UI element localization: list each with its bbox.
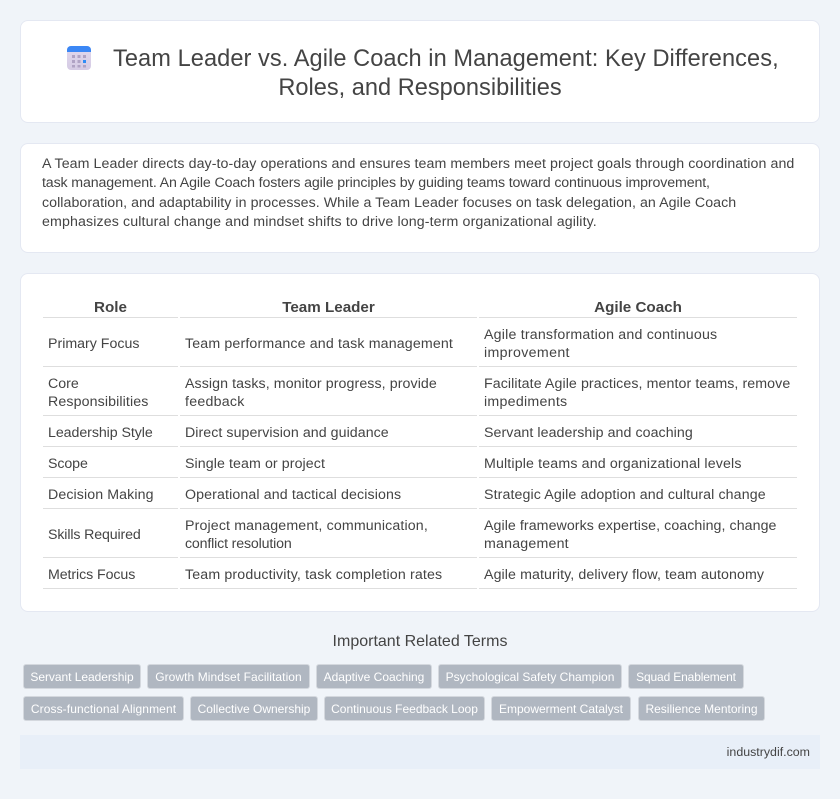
table header: Team Leader: Team Leader (282, 299, 375, 316)
row: Scope: Scope (48, 456, 88, 472)
related term tags: Continuous Feedback Loop (331, 702, 478, 716)
row: Skills Required: management (484, 536, 569, 552)
row: Decision Making (48, 487, 766, 503)
related term tags: Collective Ownership (198, 702, 310, 716)
intro text: collaboration, and adaptability in processes. While a Team Leader focuses on task delegation, an Agile Coach (42, 195, 736, 211)
footer bar (20, 735, 820, 769)
intro text (42, 156, 794, 230)
row: Metrics Focus (48, 567, 764, 583)
row: Skills Required: conflict resolution (185, 536, 292, 552)
row: Skills Required: Agile frameworks expertise, coaching, change (484, 518, 776, 534)
icon: calendar (67, 46, 91, 70)
intro text: emphasizes cultural change and mindset shifts to drive long-term organizational agility. (42, 214, 597, 230)
table header: Role: Role (94, 299, 127, 316)
row: Decision Making: Operational and tactical decisions (185, 487, 401, 503)
row: Metrics Focus: Team productivity, task completion rates (185, 567, 442, 583)
row: Core Responsibilities: feedback (185, 394, 245, 410)
intro card (20, 143, 820, 253)
related term tags: Empowerment Catalyst (499, 702, 623, 716)
related term tags: Servant Leadership (30, 670, 134, 684)
row: Skills Required: Project management, communication, (185, 518, 428, 534)
row: Metrics Focus: Agile maturity, delivery flow, team autonomy (484, 567, 764, 583)
footer source text: industrydif.com (727, 745, 810, 759)
comparison table (43, 317, 797, 589)
row: Core Responsibilities: Responsibilities (48, 394, 148, 410)
title: Roles, and Responsibilities (278, 75, 562, 101)
row: Primary Focus: Primary Focus (48, 336, 139, 352)
row: Skills Required: Skills Required (48, 527, 141, 543)
row: Leadership Style: Direct supervision and guidance (185, 425, 389, 441)
related term tags: Growth Mindset Facilitation (155, 670, 302, 684)
related term tags: Cross-functional Alignment (31, 702, 176, 716)
row: Leadership Style: Leadership Style (48, 425, 153, 441)
row: Scope: Single team or project (185, 456, 325, 472)
row: Scope (48, 456, 742, 472)
row: Core Responsibilities: impediments (484, 394, 567, 410)
row: Metrics Focus: Metrics Focus (48, 567, 135, 583)
row: Core Responsibilities: Facilitate Agile practices, mentor teams, remove (484, 376, 790, 392)
row: Scope: Multiple teams and organizational levels (484, 456, 742, 472)
related term tags: Psychological Safety Champion (446, 670, 614, 684)
row: Primary Focus: Team performance and task management (185, 336, 453, 352)
title: Team Leader vs. Agile Coach in Management: Key Differences, (113, 46, 779, 72)
comparison table panel (20, 273, 820, 612)
row: Primary Focus: improvement (484, 345, 570, 361)
row: Primary Focus: Agile transformation and continuous (484, 327, 717, 343)
table header: Agile Coach: Agile Coach (594, 299, 682, 316)
header card (20, 20, 820, 123)
row: Leadership Style: Servant leadership and coaching (484, 425, 693, 441)
row: Core Responsibilities (48, 376, 790, 410)
related terms heading: Important Related Terms (333, 633, 507, 650)
row: Leadership Style (48, 425, 693, 441)
row: Skills Required (48, 518, 776, 552)
title (113, 46, 779, 101)
row: Primary Focus (48, 327, 717, 361)
intro text: A Team Leader directs day-to-day operations and ensures team members meet project goals through coordination and (42, 156, 794, 172)
related term tags: Adaptive Coaching (324, 670, 424, 684)
row: Core Responsibilities: Assign tasks, monitor progress, provide (185, 376, 437, 392)
related term tags: Squad Enablement (636, 670, 736, 684)
row: Decision Making: Decision Making (48, 487, 154, 503)
related term tags (23, 664, 765, 721)
related term tags: Resilience Mentoring (645, 702, 758, 716)
row: Decision Making: Strategic Agile adoption and cultural change (484, 487, 766, 503)
row: Core Responsibilities: Core (48, 376, 79, 392)
intro text: task management. An Agile Coach fosters agile principles by guiding teams toward continuous improvement, (42, 175, 710, 191)
